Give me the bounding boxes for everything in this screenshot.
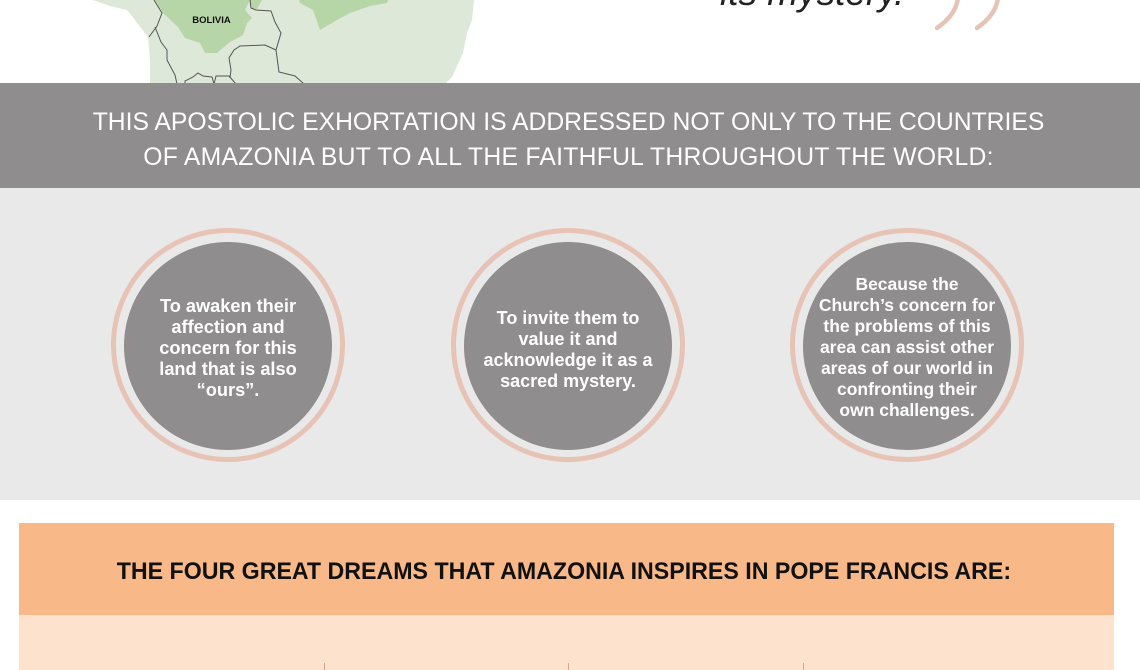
land mass — [93, 0, 474, 84]
text: reason 3 — [819, 274, 995, 420]
heading text: THIS APOSTOLIC EXHORTATION IS ADDRESSED NOT ONLY TO THE COUNTRIES — [93, 109, 1044, 136]
highlighted region top right — [299, 0, 388, 30]
ring: reason 3 — [790, 228, 1024, 462]
text: reason 3: own challenges. — [839, 400, 975, 420]
text: reason 3: areas of our world in — [821, 358, 993, 378]
heading text — [93, 109, 1044, 171]
label: Bolivia: BOLIVIA — [192, 15, 231, 26]
text: reason 1: concern for this — [159, 338, 297, 358]
map of South America — [94, 0, 474, 83]
text: reason 2: sacred mystery. — [500, 371, 636, 391]
highlighted Bolivia — [155, 0, 252, 53]
dreams heading band — [19, 523, 1114, 615]
country borders — [149, 0, 304, 84]
text: reason 2: value it and — [518, 329, 618, 349]
highlighted region small — [250, 0, 262, 9]
heading band — [0, 83, 1140, 188]
text: reason 3: Church’s concern for — [819, 295, 995, 315]
panel: reasons — [0, 188, 1140, 500]
text: reason 3: Because the — [855, 274, 959, 294]
column dividers — [324, 663, 325, 670]
text: reason 3: confronting their — [837, 379, 977, 399]
text: reason 2 — [483, 308, 653, 391]
text: reason 3: area can assist other — [820, 337, 994, 357]
heading text: OF AMAZONIA BUT TO ALL THE FAITHFUL THROUGHOUT THE WORLD: — [143, 144, 994, 171]
circle: reason 2 — [464, 242, 672, 450]
ring: reason 2 — [451, 228, 685, 462]
dreams panel — [19, 615, 1114, 670]
text: reason 3: the problems of this — [823, 316, 991, 336]
ring: reason 1 — [111, 228, 345, 462]
text: reason 1: affection and — [171, 317, 285, 337]
text: reason 2: To invite them to — [497, 308, 639, 328]
icon: closing quotation marks — [934, 0, 1000, 30]
text: reason 1: “ours”. — [197, 380, 259, 400]
text: reason 1: land that is also — [159, 359, 297, 379]
dreams heading text: THE FOUR GREAT DREAMS THAT AMAZONIA INSPIRES IN POPE FRANCIS ARE: — [117, 558, 1011, 585]
text: reason 1: To awaken their — [160, 296, 296, 316]
text: reason 1 — [159, 296, 297, 400]
text: reason 2: acknowledge it as a — [483, 350, 653, 370]
circle: reason 1 — [124, 242, 332, 450]
circle: reason 3 — [803, 242, 1011, 450]
